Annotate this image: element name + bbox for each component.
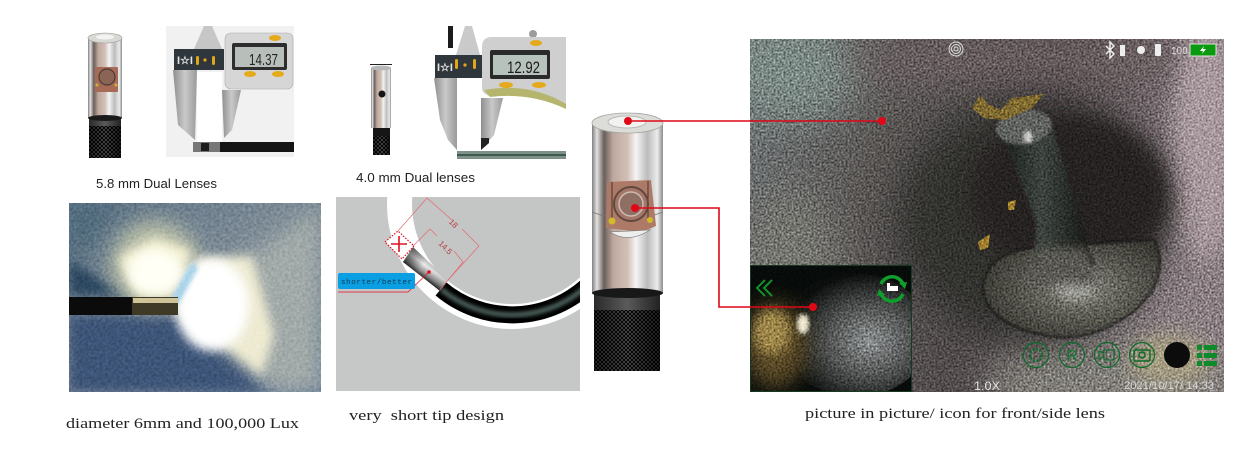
label: shorter/better: shorter/better: [341, 279, 412, 287]
caption: 5.8 mm: 5.8 mm Dual Lenses: [96, 176, 217, 191]
caption: light: diameter 6mm and 100,000 Lux: [66, 416, 300, 432]
icon: settings: [1024, 342, 1048, 368]
panel: short tip diagram: [336, 197, 580, 391]
rust spots: [972, 94, 1044, 250]
icon: front/side lens switch: [877, 277, 907, 301]
dimension 14.5: 14.5: [437, 239, 454, 257]
panel: 4.0 mm probe tip photo: [370, 64, 392, 155]
pin shaft: [994, 106, 1100, 285]
panel: caliper measuring 14.37: [166, 26, 294, 157]
icon: R mode: R: [1066, 348, 1078, 365]
icon: photo camera: [1130, 342, 1154, 368]
date stamp: 2021/10/17/ 14:33: [1124, 380, 1214, 392]
side lens module: [606, 180, 656, 238]
icon: usb storage: [1155, 44, 1161, 56]
caption: short tip: very short tip design: [349, 408, 505, 424]
arrow: side lens to inset view: [631, 204, 817, 311]
arrow: front lens to main view: [624, 117, 886, 125]
icon: bluetooth: [1106, 42, 1114, 58]
icon: fingerprint: [949, 42, 963, 56]
removed length marker: [385, 231, 414, 259]
icon: R mode: [1060, 342, 1084, 368]
icon: green battery: [1190, 44, 1216, 56]
inset: picture in picture: [750, 265, 912, 392]
icon: collapse chevrons: [757, 280, 772, 296]
panel: 5.8 mm probe tip photo: [88, 33, 122, 158]
icon: menu: [1197, 345, 1217, 366]
panel: light output photo: [69, 203, 321, 392]
pit floor disc: [983, 240, 1160, 337]
icon: video camera: [1094, 342, 1120, 368]
icon: battery cell: [1120, 45, 1125, 56]
caption: picture in picture: picture in picture/ icon for front/side lens: [805, 406, 1105, 422]
icon: light bulb: [1137, 46, 1145, 54]
caption: 4.0 mm: 4.0 mm Dual lenses: [356, 170, 476, 185]
flexible tube: [441, 283, 590, 315]
overlay: top status icons: [949, 42, 1216, 58]
panel: caliper measuring 14.37: I☆I: [177, 55, 193, 67]
panel: main camera view: [750, 39, 1224, 392]
panel: caliper measuring 12.92: [434, 26, 566, 159]
icon: record ball: [1164, 342, 1190, 368]
panel: enlarged dual lens probe: [592, 113, 663, 371]
dimension lines: [338, 198, 479, 292]
battery level: 100: [1171, 46, 1188, 57]
dimension 18: 18: [447, 217, 460, 230]
caliper reading: 12.92: [507, 58, 540, 77]
overlay: bottom control icons: [1024, 342, 1217, 368]
silver tip: [403, 247, 448, 291]
panel: caliper measuring 12.92: I☆I: [437, 62, 453, 74]
zoom level: 1.0X: [974, 379, 1000, 393]
label: shorter/better: [338, 273, 415, 289]
caliper reading: 14.37: [249, 52, 278, 69]
